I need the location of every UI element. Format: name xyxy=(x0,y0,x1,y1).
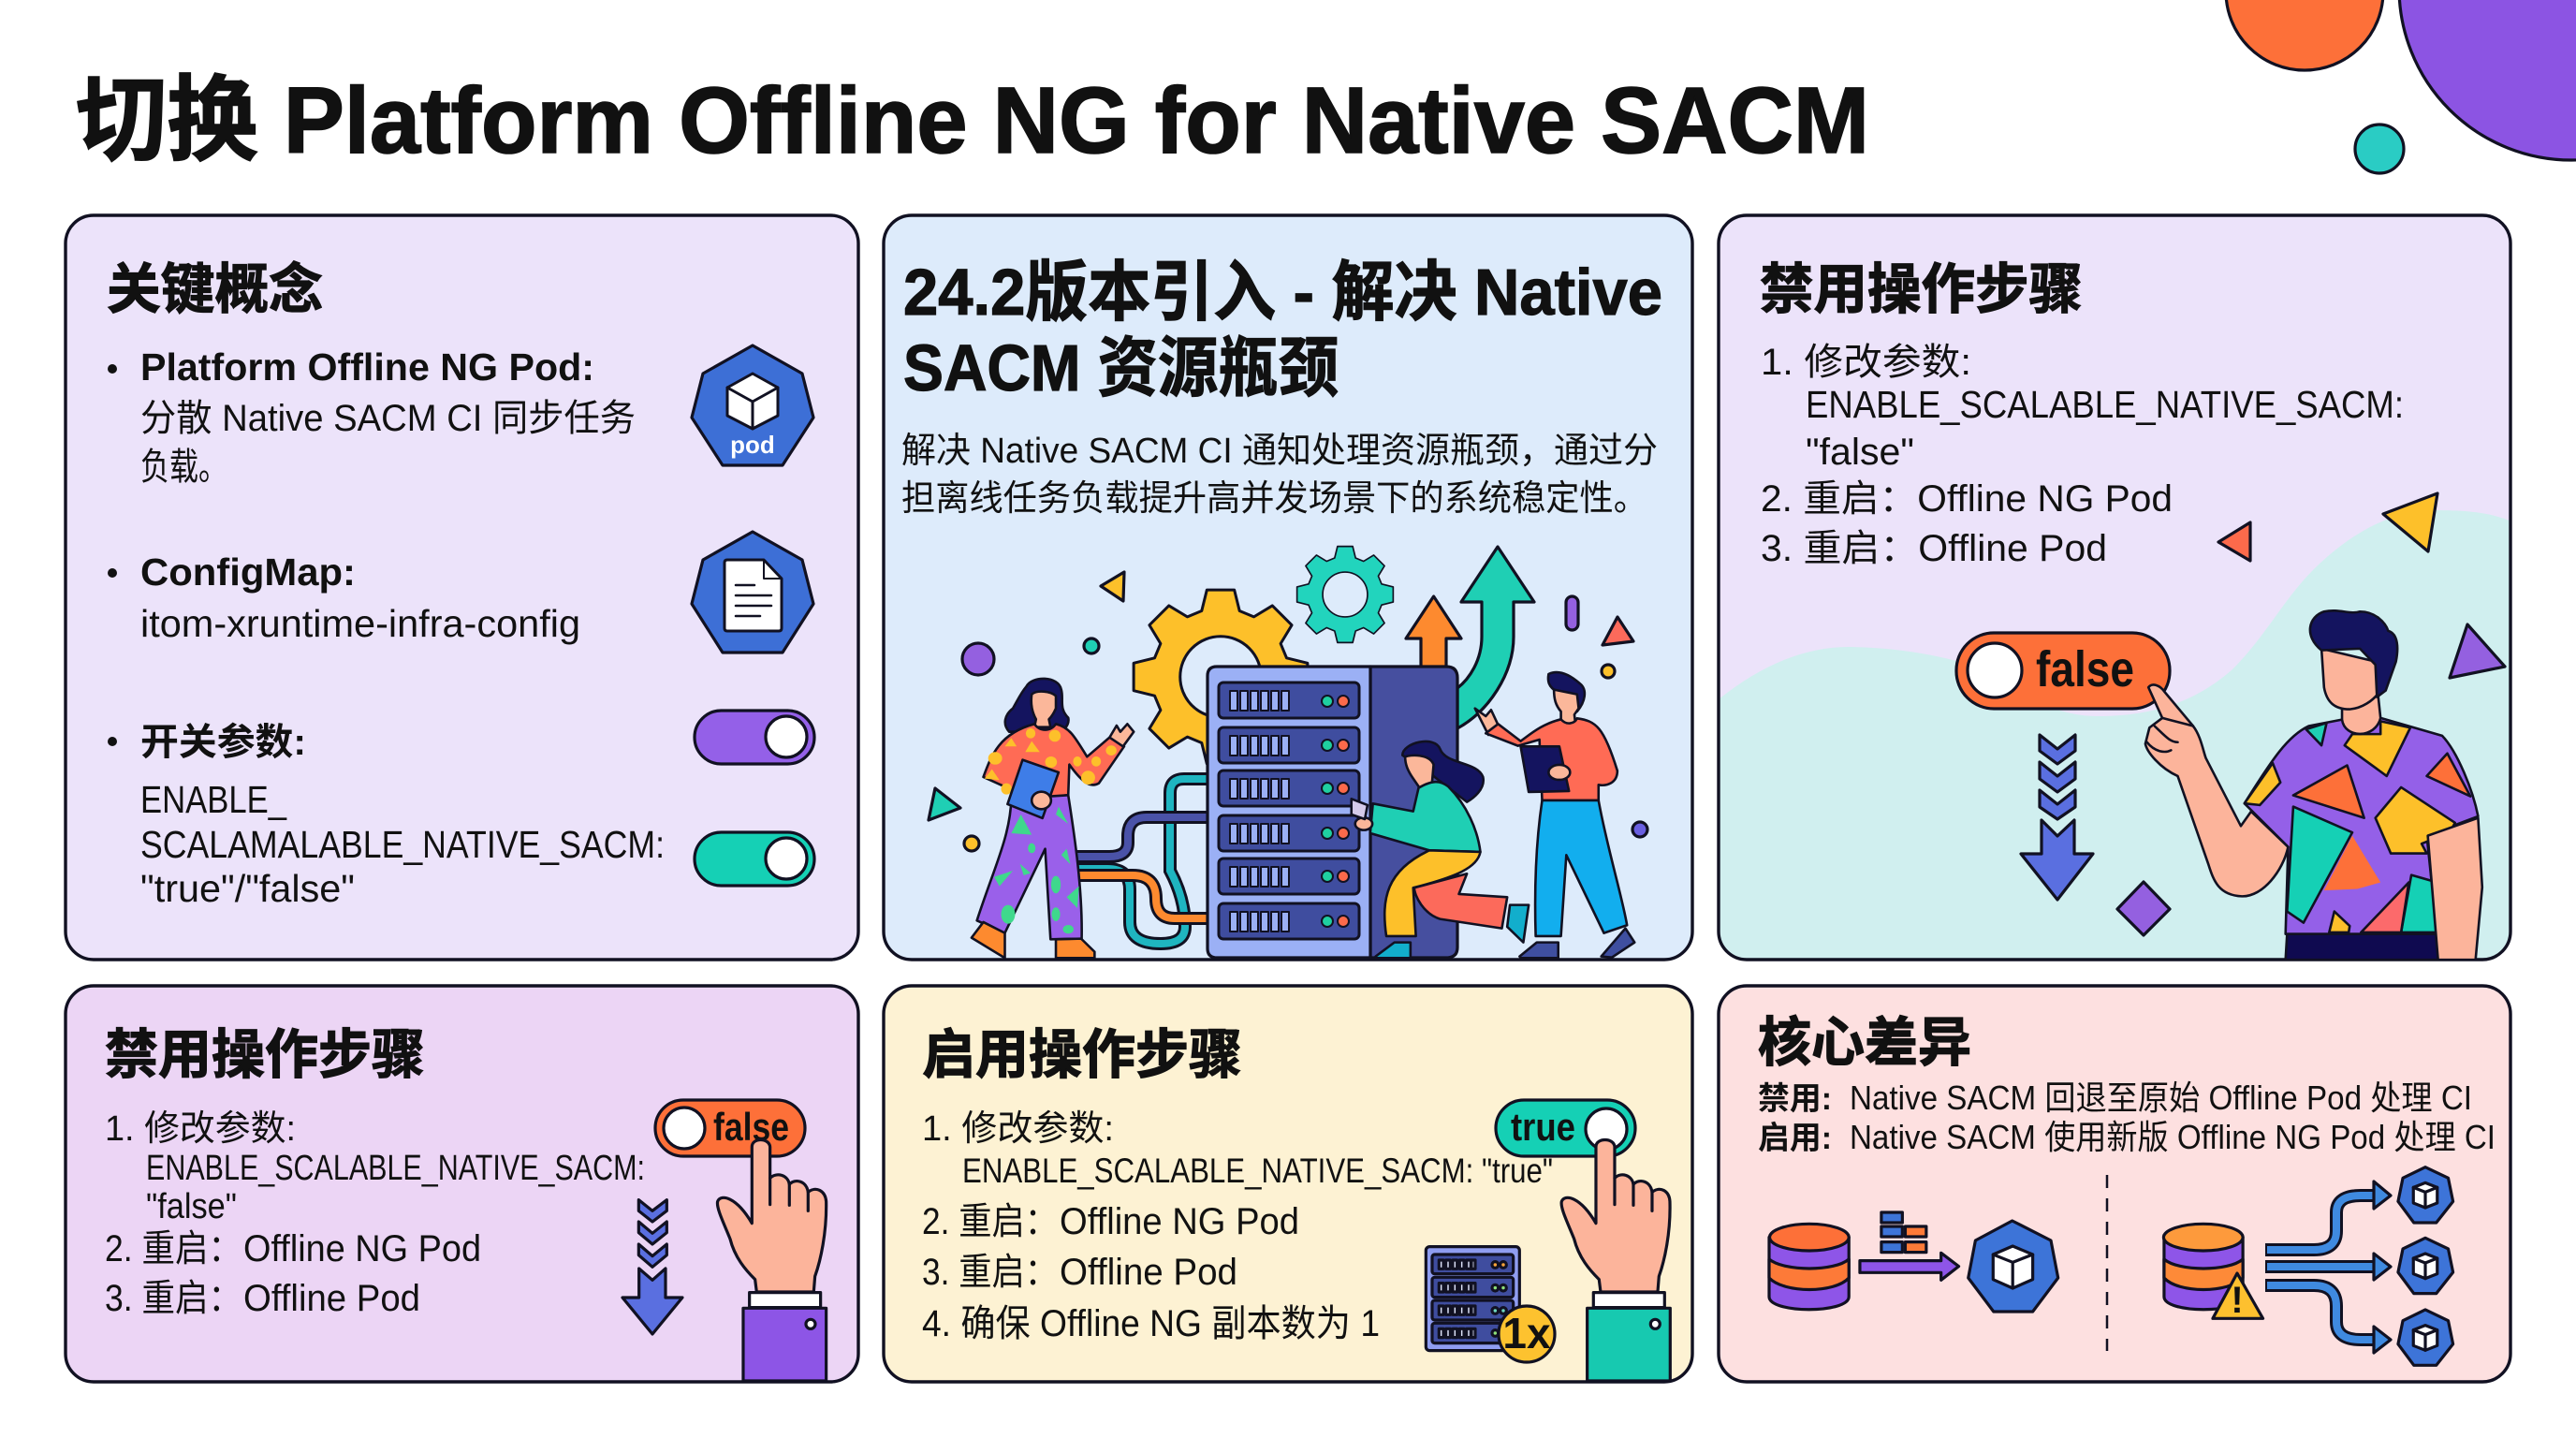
person: man pressing toggle xyxy=(2145,610,2482,960)
panel: 禁用操作步骤 (lower) xyxy=(66,986,858,1382)
icon: purple toggle xyxy=(695,711,814,764)
steps list xyxy=(922,1109,1553,1344)
decorative shapes xyxy=(929,572,1647,851)
gears xyxy=(1134,547,1393,764)
heading: 24.2版本引入 xyxy=(903,256,1662,404)
steps list: 2. 重启：Offline NG Pod xyxy=(1761,478,2173,520)
concept: ConfigMap: ConfigMap: xyxy=(140,550,356,594)
icon: pod heptagon xyxy=(692,345,813,465)
person: kneeling woman at rack xyxy=(1352,741,1529,958)
title: 切换 Platform Offline NG for Native SACM xyxy=(76,68,1869,173)
small server with 1x badge xyxy=(1426,1247,1519,1351)
heading: 禁用操作步骤: 禁用操作步骤 xyxy=(105,1025,425,1085)
diagram: disabled flow xyxy=(1769,1212,2058,1312)
badge: 1x: 1x xyxy=(1502,1309,1551,1357)
down chevrons and arrow xyxy=(2021,735,2093,900)
growth arrows xyxy=(1406,547,1534,728)
concept: 开关参数: SCALAMALABLE_NATIVE_SACM: xyxy=(140,823,665,866)
heading: 24.2版本引入: 24.2版本引入 - 解决 Native xyxy=(903,256,1662,329)
steps list: 1. 修改参数: xyxy=(922,1109,1114,1149)
icon: teal toggle xyxy=(695,832,814,886)
concept: 开关参数: 开关参数: xyxy=(140,722,306,763)
steps list: 3. 重启： xyxy=(922,1252,1058,1293)
concept: Platform Offline NG Pod xyxy=(108,345,636,488)
steps list: Offline NG Pod xyxy=(243,1228,481,1269)
illustration: team and server rack xyxy=(929,547,1647,958)
panel outline xyxy=(1719,215,2510,960)
steps list: ENABLE_SCALABLE_NATIVE_SACM: xyxy=(146,1149,645,1188)
diagram: enabled flow xyxy=(2163,1167,2453,1365)
false toggle: false xyxy=(713,1105,789,1149)
background wave xyxy=(1713,510,2518,964)
panel: 关键概念 xyxy=(66,215,858,960)
steps list: 3. 重启：Offline Pod xyxy=(1761,528,2107,569)
warning mark: ! xyxy=(2231,1280,2244,1321)
decorative triangles and diamond xyxy=(2117,493,2505,935)
heading: 关键概念: 关键概念 xyxy=(107,259,323,320)
steps list: Offline NG Pod xyxy=(1060,1201,1299,1242)
steps list: 4. 确保 Offline NG 副本数为 1 xyxy=(922,1303,1380,1344)
false toggle pill xyxy=(1956,633,2170,709)
steps list: "false" xyxy=(1806,432,1914,473)
concept: Platform Offline NG Pod: Platform Offline NG Pod: xyxy=(140,345,594,389)
false toggle pill: false xyxy=(2036,641,2134,697)
concept: Platform Offline NG Pod: 负载。 xyxy=(140,447,227,488)
concept: Platform Offline NG Pod: 分散 Native SACM CI 同步任务 xyxy=(140,398,636,439)
description text: 解决 Native SACM CI 通知处理资源瓶颈，通过分 xyxy=(901,432,1658,471)
false toggle xyxy=(655,1100,805,1156)
text: disabled and enabled difference: 禁用: xyxy=(1758,1081,1832,1117)
concept: 开关参数 xyxy=(108,722,665,910)
steps list: ENABLE_SCALABLE_NATIVE_SACM: "true" xyxy=(962,1152,1553,1190)
decorative circles: top right xyxy=(2226,0,2576,173)
server rack xyxy=(1208,667,1457,958)
steps list: 3. 重启： xyxy=(105,1278,242,1319)
arrow heads xyxy=(2374,1181,2391,1353)
down chevrons and arrow xyxy=(622,1200,682,1334)
panel: 禁用操作步骤 with illustration xyxy=(1713,215,2518,964)
text: disabled and enabled difference: Native SACM 回退至原始 Offline Pod 处理 CI xyxy=(1850,1078,2472,1117)
steps list: Offline Pod xyxy=(1060,1252,1237,1293)
hand pressing toggle xyxy=(1561,1139,1670,1381)
icon: ConfigMap document heptagon xyxy=(692,532,813,653)
description text: 担离线任务负载提升高并发场景下的系统稳定性。 xyxy=(901,479,1647,519)
steps list xyxy=(105,1109,645,1319)
steps list: 2. 重启： xyxy=(922,1201,1058,1242)
panel: 24.2版本引入 xyxy=(884,215,1692,960)
person: woman with folder xyxy=(972,679,1134,958)
divider xyxy=(2106,1175,2108,1351)
icon: pod heptagon: pod xyxy=(730,431,775,459)
steps list: 2. 重启： xyxy=(105,1228,242,1269)
concept: ConfigMap: itom-xruntime-infra-config xyxy=(140,602,580,645)
steps list: Offline Pod xyxy=(243,1278,420,1319)
text: disabled and enabled difference: Native SACM 使用新版 Offline NG Pod 处理 CI xyxy=(1850,1118,2496,1156)
text: disabled and enabled difference xyxy=(1758,1078,2496,1156)
steps list: "false" xyxy=(146,1187,237,1226)
steps list xyxy=(1761,342,2404,569)
small pod icons xyxy=(2398,1167,2453,1365)
steps list: 1. 修改参数: xyxy=(105,1109,296,1149)
heading: 禁用操作步骤: 禁用操作步骤 xyxy=(1760,259,2083,320)
panel: 核心差异 xyxy=(1719,986,2510,1382)
steps list: 1. 修改参数: xyxy=(1761,342,1971,383)
true toggle: true xyxy=(1511,1105,1575,1149)
person: man with clipboard xyxy=(1475,672,1634,958)
fan-out arrows xyxy=(2265,1196,2379,1340)
text: disabled and enabled difference: 启用: xyxy=(1758,1121,1832,1156)
hand pressing toggle xyxy=(717,1139,827,1381)
heading: 核心差异: 核心差异 xyxy=(1758,1013,1971,1073)
heading: 启用操作步骤: 启用操作步骤 xyxy=(922,1025,1242,1085)
cables xyxy=(1076,779,1208,944)
concept: ConfigMap xyxy=(108,550,580,645)
concept: 开关参数: ENABLE_ xyxy=(140,778,287,821)
description text xyxy=(901,432,1658,519)
heading: 24.2版本引入: SACM 资源瓶颈 xyxy=(903,331,1339,404)
concept: 开关参数: "true"/"false" xyxy=(140,867,355,910)
panel: 启用操作步骤 xyxy=(884,986,1692,1382)
true toggle xyxy=(1496,1100,1635,1156)
steps list: ENABLE_SCALABLE_NATIVE_SACM: xyxy=(1806,383,2404,426)
